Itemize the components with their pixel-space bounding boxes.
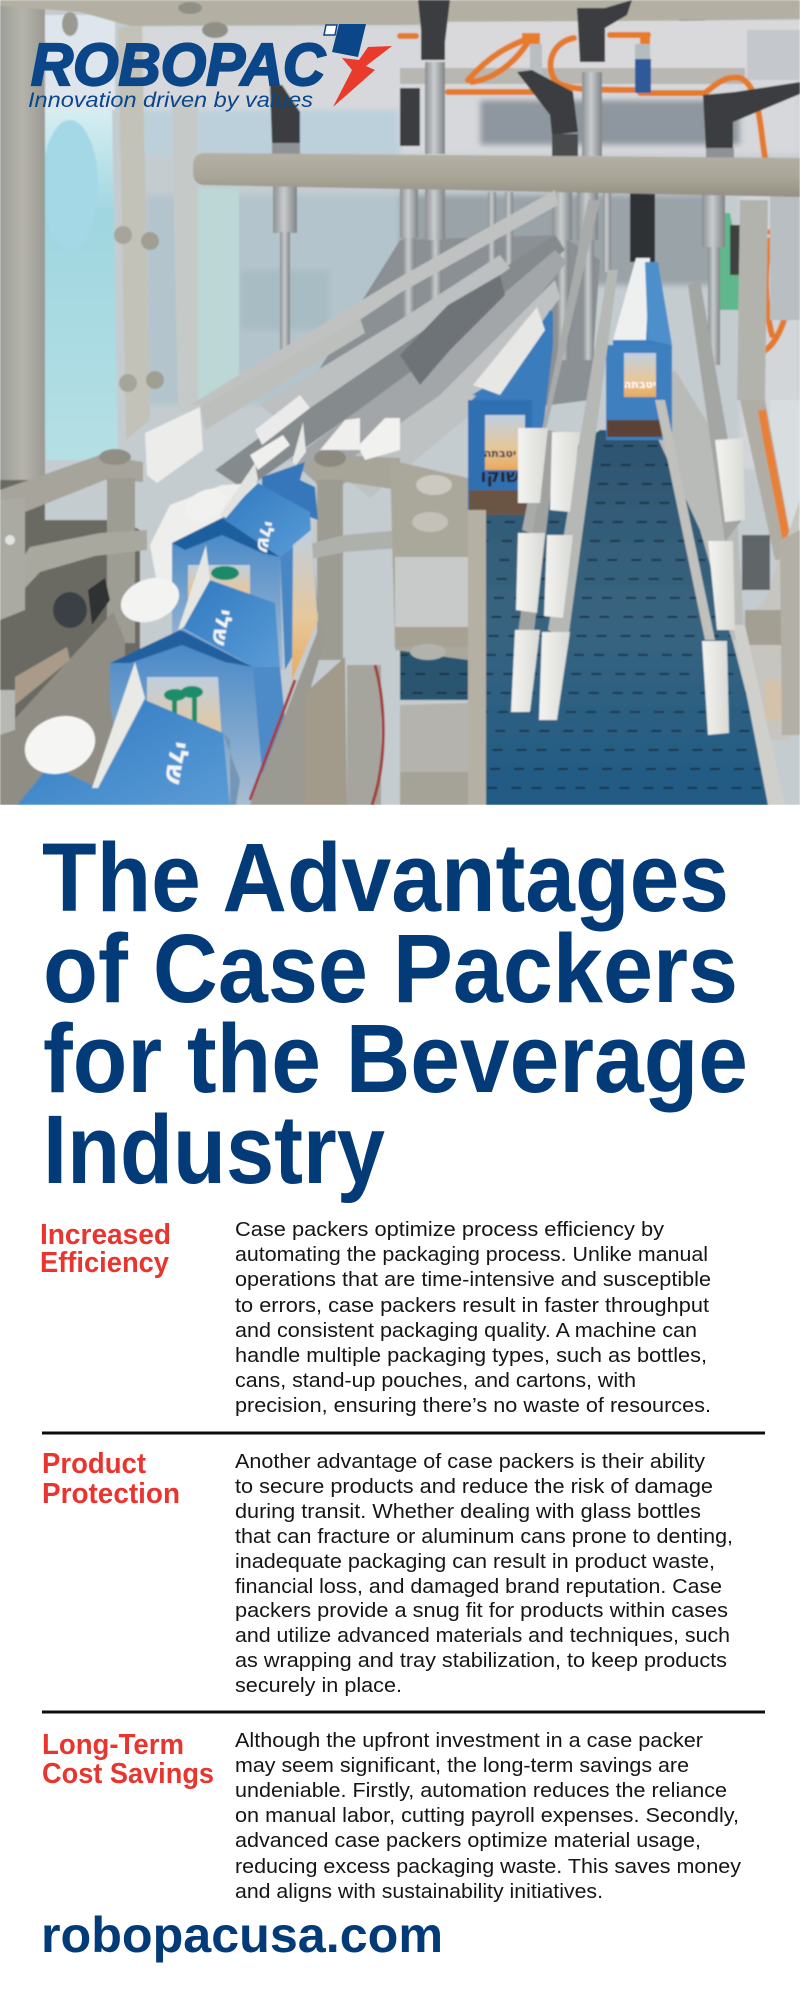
white pads, upper left rail: [145, 318, 400, 483]
body text: undeniable. Firstly, automation reduces the reliance: [235, 1779, 727, 1802]
far blue carton: [250, 422, 318, 520]
logo mark: [324, 24, 392, 107]
title: The Advantages: [42, 823, 729, 932]
left pillar: [0, 0, 45, 480]
body text: and consistent packaging quality. A machine can: [235, 1319, 697, 1342]
section: increased efficiency: [40, 1218, 711, 1417]
title: [42, 823, 748, 1204]
handle knobs above crossbar: [270, 0, 800, 150]
bottom carton: שלי: [158, 739, 195, 787]
body text: [235, 1218, 711, 1417]
body text: advanced case packers optimize material usage,: [235, 1829, 701, 1852]
body text: Case packers optimize process efficiency by: [235, 1218, 665, 1241]
blue sensor: [635, 59, 651, 93]
top beam: [0, 0, 800, 26]
title: of Case Packers: [43, 914, 738, 1023]
logo: [28, 24, 392, 112]
heading: Increased: [40, 1219, 171, 1251]
diagonal conveyor guide rails: [190, 190, 567, 498]
steel rods below crossbar: [273, 185, 725, 365]
body text: Although the upfront investment in a case packer: [235, 1729, 703, 1752]
body text: securely in place.: [235, 1674, 402, 1697]
website url: robopacusa.com: [41, 1907, 443, 1963]
body text: reducing excess packaging waste. This saves money: [235, 1855, 742, 1878]
heading: [40, 1219, 171, 1279]
heading: Long-Term: [42, 1729, 184, 1761]
second carton: שלי: [206, 607, 237, 648]
title: for the Beverage: [43, 1004, 748, 1113]
glass panel: [44, 110, 118, 460]
title: Industry: [43, 1095, 385, 1204]
conveyor belt: [486, 430, 775, 805]
body text: on manual labor, cutting payroll expenses. Secondly,: [235, 1804, 739, 1827]
right column: [737, 200, 768, 400]
section: product protection: [42, 1448, 733, 1697]
heading: [42, 1448, 180, 1510]
body text: to errors, case packers result in faster throughput: [235, 1294, 709, 1317]
body text: [235, 1729, 742, 1903]
logo wordmark: ROBOPAC: [31, 32, 326, 98]
third carton: שלי: [252, 519, 279, 555]
heading: [42, 1729, 214, 1790]
third carton: [150, 463, 318, 680]
red belt and side strip: [250, 625, 383, 805]
body text: that can fracture or aluminum cans prone to denting,: [235, 1525, 733, 1548]
centre bracket: [305, 449, 486, 805]
body text: inadequate packaging can result in product waste,: [235, 1550, 715, 1573]
green block: [719, 212, 740, 311]
crossbar: [193, 153, 800, 197]
body text: operations that are time-intensive and susceptible: [235, 1268, 711, 1291]
section: long-term cost savings: [42, 1729, 742, 1903]
steel rods above crossbar: [425, 62, 445, 154]
bottom carton: [17, 662, 240, 805]
body text: and aligns with sustainability initiatives.: [235, 1880, 603, 1903]
body text: as wrapping and tray stabilization, to keep products: [235, 1649, 727, 1672]
machine background, blurred: [140, 25, 800, 470]
body text: and utilize advanced materials and techniques, such: [235, 1624, 730, 1647]
second carton: [110, 545, 287, 805]
middle carton row: [606, 258, 672, 440]
heading: Product: [42, 1448, 146, 1480]
body text: [235, 1450, 733, 1697]
body text: to secure products and reduce the risk of damage: [235, 1475, 713, 1498]
logo tagline: Innovation driven by values: [28, 89, 314, 112]
body text: automating the packaging process. Unlike manual: [235, 1243, 708, 1266]
right rail: [658, 370, 744, 640]
body text: cans, stand-up pouches, and cartons, with: [235, 1369, 636, 1392]
body text: may seem significant, the long-term savings are: [235, 1754, 689, 1777]
right side wiring: [740, 400, 800, 740]
body text: Another advantage of case packers is their ability: [235, 1450, 706, 1473]
left carton row: יטבתה: [484, 447, 516, 460]
dark machine zone behind rails: [320, 235, 600, 406]
heading: Cost Savings: [42, 1758, 214, 1790]
middle carton row: יטבתה: [624, 378, 656, 391]
left machine arms: [0, 449, 147, 805]
body text: packers provide a snug fit for products within cases: [235, 1599, 728, 1622]
guide rails with white pads: [511, 200, 745, 735]
frame column: [118, 25, 150, 440]
left carton row: שוקו: [480, 466, 520, 487]
heading: Protection: [42, 1478, 180, 1510]
hero photo: case packer machine with beverage cartons: [0, 0, 800, 805]
body text: handle multiple packaging types, such as bottles,: [235, 1344, 707, 1367]
body text: financial loss, and damaged brand reputation. Case: [235, 1575, 722, 1598]
heading: Efficiency: [40, 1247, 169, 1279]
left carton row: [468, 307, 553, 515]
body text: precision, ensuring there’s no waste of resources.: [235, 1394, 711, 1417]
orange cables: [400, 35, 791, 352]
body text: during transit. Whether dealing with glass bottles: [235, 1500, 701, 1523]
back wall band: [420, 20, 800, 39]
